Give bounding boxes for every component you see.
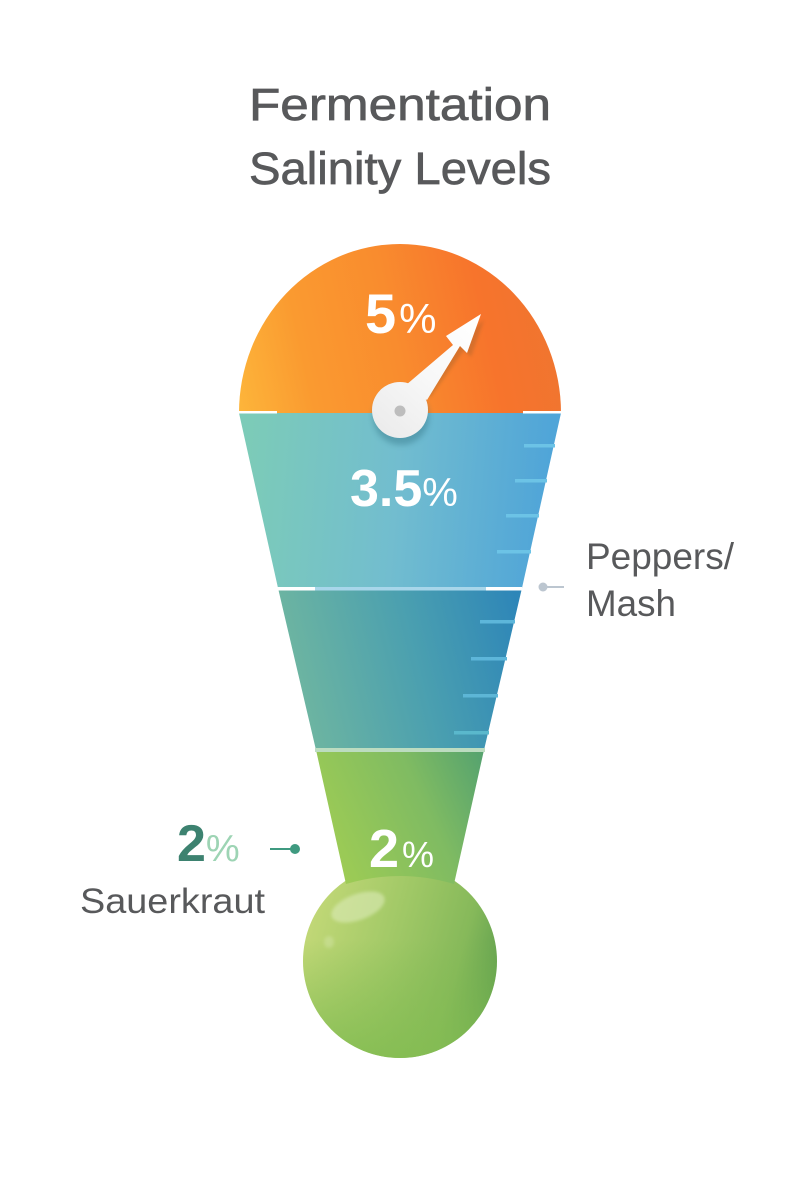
band: teal bbox=[278, 588, 522, 750]
scale tick marks bbox=[454, 444, 555, 734]
title: Fermentation bbox=[249, 79, 551, 130]
bulb bbox=[303, 864, 497, 1058]
callout: Peppers/Mash: Peppers/ bbox=[586, 536, 735, 577]
title bbox=[249, 79, 551, 194]
callout: Peppers/Mash: Mash bbox=[586, 583, 676, 624]
band: 3.5% blue bbox=[239, 413, 561, 588]
thermometer gauge bbox=[239, 244, 561, 1058]
callout pointer bbox=[538, 582, 564, 592]
band: 2% green bbox=[316, 750, 484, 884]
band: 3.5% blue: 3.5% bbox=[350, 460, 458, 518]
band: 5% orange head bbox=[239, 244, 561, 413]
band: 5% orange head: 5% bbox=[365, 282, 437, 345]
callout: 2% Sauerkraut bbox=[80, 815, 300, 921]
callout: 2% Sauerkraut: Sauerkraut bbox=[80, 882, 265, 921]
gauge needle bbox=[372, 314, 484, 445]
title: Salinity Levels bbox=[249, 143, 551, 194]
callout pointer bbox=[270, 844, 300, 854]
callout: 2% Sauerkraut: 2% bbox=[177, 815, 240, 873]
band: 2% green: 2% bbox=[369, 819, 434, 879]
band dividers bbox=[239, 411, 561, 752]
callout: Peppers/Mash bbox=[538, 536, 735, 624]
